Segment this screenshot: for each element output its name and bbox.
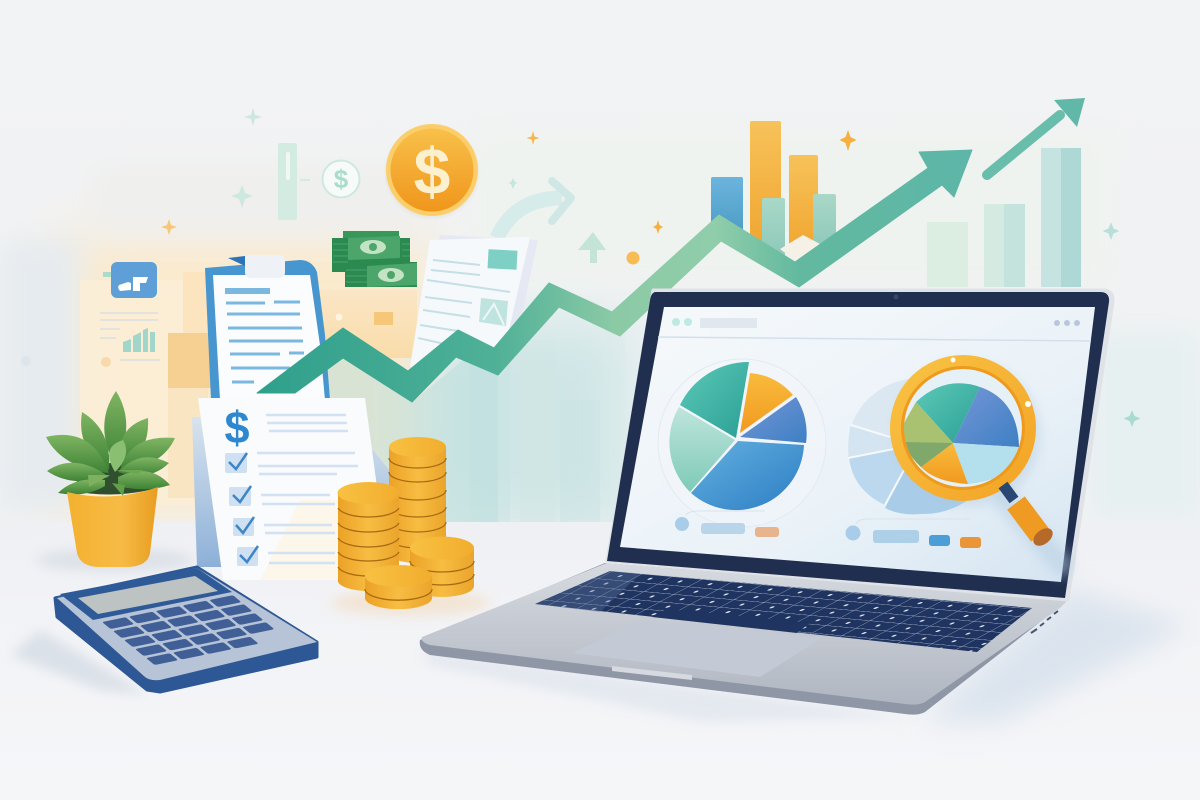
calculator keys — [102, 595, 285, 665]
right stack — [410, 536, 474, 597]
left pie chart — [658, 359, 826, 527]
green trend line with arrowhead — [257, 150, 972, 402]
pot — [67, 487, 158, 567]
right chart legend — [846, 519, 981, 548]
leaves — [46, 391, 175, 496]
laptop screen — [620, 307, 1095, 582]
coloured bar chart behind the trend line — [711, 121, 836, 263]
left chart legend — [675, 511, 779, 537]
icon: small dollar circle — [322, 160, 360, 198]
background orange blocks — [168, 272, 417, 498]
dollar symbol: $ — [224, 402, 250, 453]
green money stack — [332, 231, 417, 287]
laptop — [420, 290, 1113, 715]
clipboard — [205, 255, 330, 400]
potted plant — [46, 391, 175, 567]
background teal squares under the line — [295, 330, 625, 522]
laptop lid — [607, 290, 1113, 600]
keyboard — [535, 571, 1032, 652]
side ports — [1031, 611, 1058, 633]
calculator display — [78, 576, 218, 614]
front notch — [612, 666, 692, 680]
front stack — [365, 565, 432, 609]
right pale bar chart — [927, 148, 1081, 287]
clipboard clip — [228, 255, 285, 278]
laptop base — [420, 563, 1068, 715]
blue folder behind checklist — [192, 417, 389, 567]
shadows on desk — [10, 548, 1190, 722]
calculator — [55, 567, 317, 692]
icon: gold dollar coin: $ — [414, 134, 450, 208]
teal arrow top right — [987, 98, 1085, 175]
icon: small dollar circle: $ — [334, 164, 349, 194]
desk surface — [0, 522, 1200, 800]
background curved arrow — [497, 181, 571, 238]
check box 3 — [233, 517, 254, 536]
back tall stack — [389, 437, 446, 563]
background up arrow — [578, 232, 606, 263]
background: pale colour washes — [0, 130, 1200, 530]
checklist document — [198, 398, 385, 580]
magnifying glass — [896, 358, 1062, 565]
icon: gold dollar coin — [386, 124, 478, 218]
check box 4 — [237, 546, 258, 566]
calculator top frame — [60, 568, 232, 620]
front bill lower — [367, 263, 417, 287]
middle stack — [338, 482, 400, 591]
decorative bar outline — [278, 143, 310, 220]
floating paper right of money — [410, 235, 538, 367]
trackpad — [572, 620, 822, 677]
background document panel with blue icon — [80, 262, 205, 505]
right faded pie chart — [848, 378, 994, 514]
coin stacks — [338, 437, 474, 609]
sparkles — [21, 108, 1140, 427]
lens ring — [897, 362, 1029, 494]
orange dot — [626, 252, 640, 264]
space bar — [652, 609, 810, 633]
soil and leaf core — [69, 462, 157, 495]
check box 1 — [225, 453, 247, 473]
lens pie — [903, 383, 1019, 484]
front bill upper — [348, 236, 400, 260]
icon: blue app tile — [103, 262, 157, 298]
check box 2 — [229, 486, 251, 506]
handle — [1003, 485, 1014, 500]
mini bar chart — [123, 328, 155, 352]
